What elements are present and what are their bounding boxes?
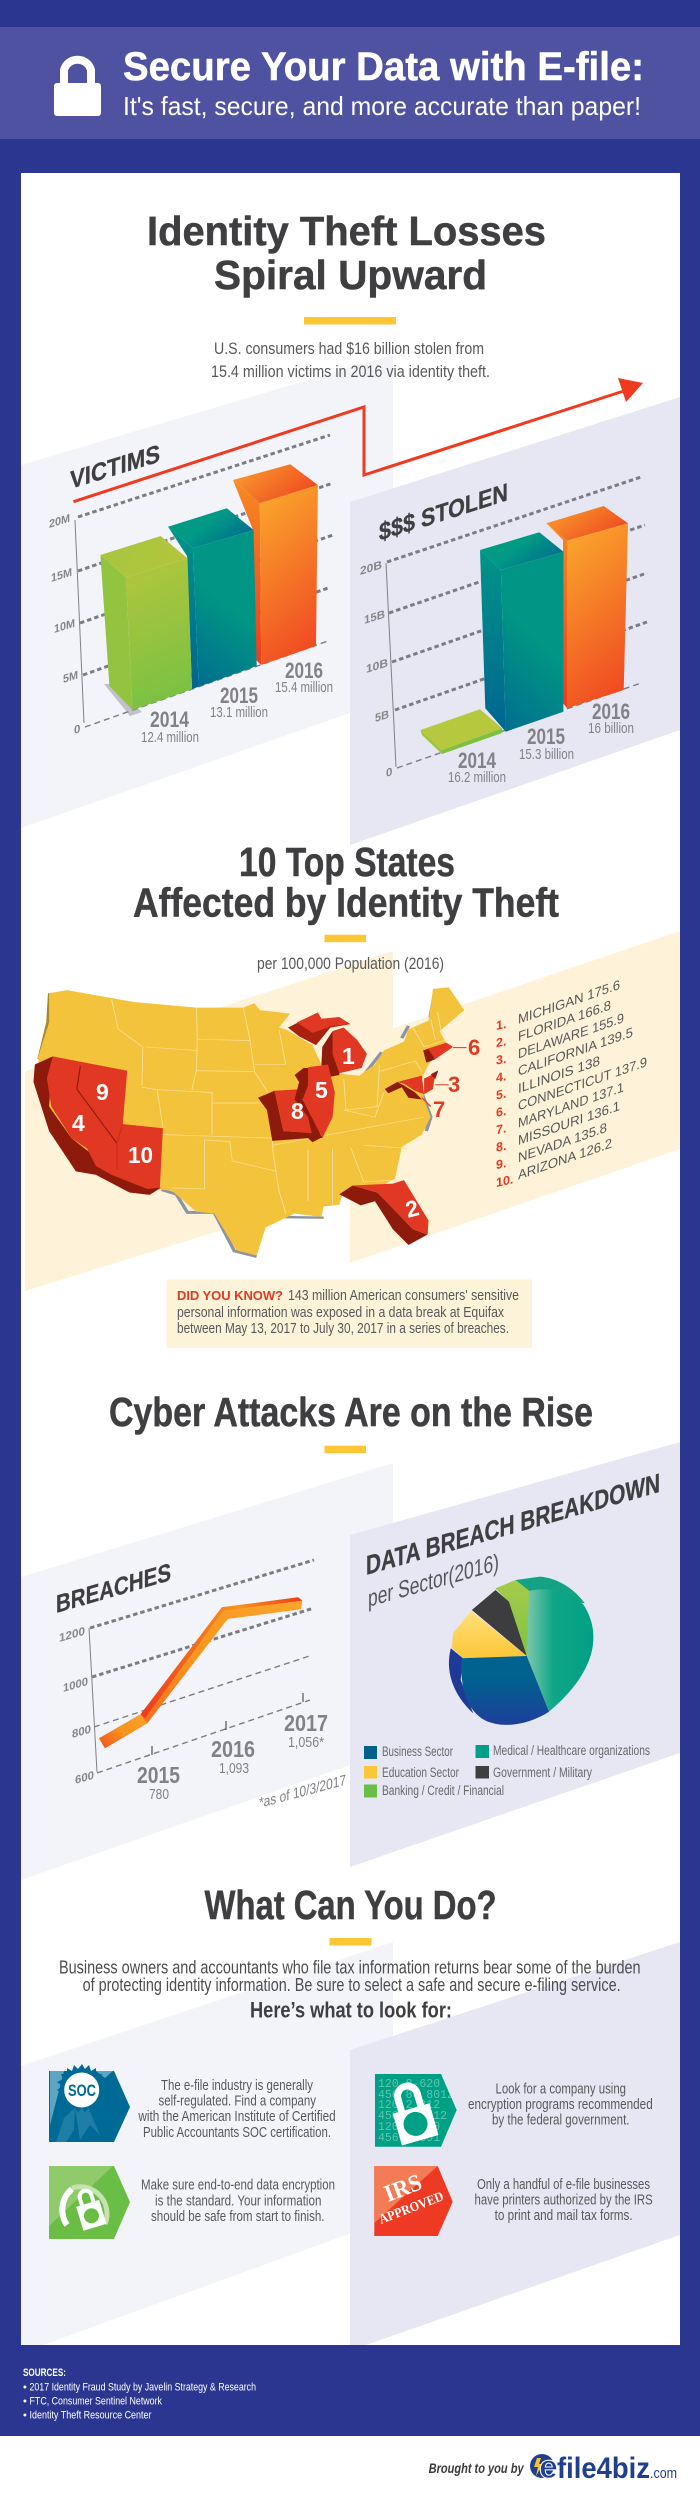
list: top states: ILLINOIS 138 xyxy=(518,1052,600,1096)
list: top states: FLORIDA 166.8 xyxy=(518,997,611,1044)
axis labels: 1000 xyxy=(63,1675,88,1695)
state: Florida xyxy=(339,1180,429,1245)
tip text: with the American Institute of Certified xyxy=(138,2108,336,2125)
intro text: 15.4 million victims in 2016 via identity theft. xyxy=(211,363,490,381)
state: Maryland and Delaware xyxy=(385,1070,438,1100)
sources: FTC, Consumer Sentinel Network xyxy=(30,2396,162,2408)
header subtitle: It's fast, secure, and more accurate than paper! xyxy=(123,91,641,121)
list: top states: 8. xyxy=(496,1139,506,1155)
ticks xyxy=(152,1693,303,1755)
bar: 2015 xyxy=(168,508,257,689)
heading: top states: 10 Top States xyxy=(239,839,455,885)
heading: identity theft losses: Identity Theft Losses xyxy=(147,208,546,254)
label: 2015: 2015 xyxy=(220,683,258,708)
label: 2015 xyxy=(519,724,574,763)
heading: what can you do: What Can You Do? xyxy=(204,1882,496,1928)
legend: Education Sector xyxy=(382,1765,459,1780)
state: Missouri xyxy=(258,1089,324,1142)
label: 2016 xyxy=(211,1736,255,1777)
axis labels: 0 xyxy=(74,722,81,737)
label: 2016: 1,093 xyxy=(219,1761,249,1777)
state: Illinois xyxy=(295,1064,335,1138)
tip text xyxy=(468,2080,653,2129)
map numbers: 2 xyxy=(403,1194,422,1223)
axis labels xyxy=(360,558,393,780)
chart: victims xyxy=(49,435,333,746)
intro text: U.S. consumers had $16 billion stolen from xyxy=(214,340,484,358)
list: top states: NEVADA 135.8 xyxy=(518,1119,607,1165)
pie chart xyxy=(449,1577,593,1725)
heading: cyber attacks: Cyber Attacks Are on the Rise xyxy=(109,1389,593,1435)
bar: 2016 xyxy=(233,464,318,665)
tip text: The e-file industry is generally xyxy=(161,2077,313,2094)
subheading: per population: per 100,000 Population (2016) xyxy=(257,955,444,973)
chart title: victims: VICTIMS xyxy=(70,440,160,495)
callout: did you know xyxy=(166,1280,532,1348)
sources: Identity Theft Resource Center xyxy=(30,2410,152,2422)
list: top states: MICHIGAN 175.6 xyxy=(518,976,620,1027)
tip text: Only a handful of e-file businesses xyxy=(477,2176,650,2193)
state: Michigan xyxy=(288,1013,367,1077)
icon: teal padlock: 120 478 0 xyxy=(378,2121,440,2134)
list: top states: 9. xyxy=(496,1156,506,1172)
callout: did you know: personal information was exposed in a data break at Equifax xyxy=(177,1305,505,1321)
icon: teal padlock: 120 2 212 xyxy=(378,2099,440,2112)
label: 2014: 2014 xyxy=(458,748,497,773)
label: 2014 xyxy=(141,707,199,746)
accent bar xyxy=(324,1446,366,1453)
label: 2016 xyxy=(588,699,634,737)
label: 2016: 2016 xyxy=(285,658,323,683)
subheading: what to look for: Here’s what to look for: xyxy=(250,1998,452,2023)
axis labels xyxy=(59,1625,94,1787)
line ribbon xyxy=(99,1597,302,1748)
sources: • xyxy=(23,2396,27,2408)
list: top states: 5. xyxy=(496,1087,506,1103)
tip text xyxy=(474,2176,653,2224)
label: 2015: 13.1 million xyxy=(210,705,268,721)
tip text: self-regulated. Find a company xyxy=(158,2092,316,2110)
tip text: Look for a company using xyxy=(496,2080,626,2097)
icon: teal padlock: 120 8-620 xyxy=(378,2078,440,2091)
icon: padlock xyxy=(54,60,101,116)
tip text: to print and mail tax forms. xyxy=(495,2207,633,2224)
label: 2014: 2014 xyxy=(150,707,190,732)
tip text: encryption programs recommended xyxy=(468,2096,653,2113)
icon: SOC seal xyxy=(49,2064,130,2142)
legend: Business Sector xyxy=(382,1744,453,1759)
list: top states: DELAWARE 155.9 xyxy=(518,1009,624,1062)
tip: end-to-end encryption xyxy=(49,2166,335,2239)
panel backgrounds xyxy=(21,355,680,2353)
axis labels: 1200 xyxy=(59,1625,85,1645)
label: 2014 xyxy=(448,748,506,786)
header band xyxy=(0,27,700,139)
accent bar xyxy=(304,317,396,324)
label: 2014: 12.4 million xyxy=(141,730,199,746)
icon: IRS approved stamp: IRS xyxy=(381,2170,426,2208)
legend xyxy=(364,1743,650,1798)
list: top states: 1. xyxy=(496,1017,506,1033)
label: 2017 xyxy=(284,1710,328,1751)
axis labels: 800 xyxy=(72,1723,91,1741)
axis labels: 5B xyxy=(375,708,389,725)
legend: Government / Military xyxy=(493,1765,592,1780)
axis labels: 600 xyxy=(75,1769,94,1787)
map: United States xyxy=(33,987,480,1257)
label: 2015: 780 xyxy=(149,1787,169,1803)
heading: top states xyxy=(133,839,559,926)
header title: Secure Your Data with E-file: xyxy=(123,45,644,89)
axis labels: 10M xyxy=(54,617,75,636)
intro text xyxy=(211,340,490,381)
icon: teal padlock: 450 90 012 xyxy=(378,2110,447,2123)
tip: IRS approved xyxy=(374,2166,653,2236)
chart subtitle: per Sector(2016) xyxy=(368,1549,499,1613)
sources: • xyxy=(23,2410,27,2422)
list: top states: MISSOURI 136.1 xyxy=(518,1097,620,1148)
sources: • xyxy=(23,2382,27,2394)
arrow: rising trend xyxy=(74,378,643,502)
bar: 2016 xyxy=(546,506,628,708)
tip text xyxy=(138,2077,336,2141)
label: 2015 xyxy=(210,683,268,721)
chart title: breaches: BREACHES xyxy=(56,1558,171,1619)
icon: SOC seal: SOC xyxy=(68,2081,96,2100)
label: 2015: 2015 xyxy=(137,1762,180,1788)
label: 2014: 16.2 million xyxy=(448,770,506,786)
bar: 2015 xyxy=(480,532,563,732)
map numbers xyxy=(72,1035,480,1223)
chart: data breach breakdown xyxy=(364,1467,660,1798)
list: top states: CONNECTICUT 137.9 xyxy=(518,1053,647,1113)
bar: 2014 xyxy=(420,709,502,754)
label: 2017: 2017 xyxy=(284,1710,328,1736)
map numbers: 8 xyxy=(291,1098,304,1124)
axis labels: 0 xyxy=(386,765,393,780)
tip text: should be safe from start to finish. xyxy=(151,2208,324,2225)
label: 2016: 16 billion xyxy=(588,721,634,737)
icon: green padlock xyxy=(49,2166,130,2239)
logo: efile4biz: file4biz xyxy=(557,2452,650,2485)
icon: teal padlock: 456 9 801 xyxy=(378,2132,440,2145)
list: top states: CALIFORNIA 139.5 xyxy=(518,1024,633,1079)
list: top states: 4. xyxy=(496,1069,506,1085)
map numbers: 9 xyxy=(96,1079,109,1105)
legend: Medical / Healthcare organizations xyxy=(493,1743,650,1758)
logo: efile4biz: e xyxy=(539,2448,558,2485)
map numbers: 10 xyxy=(128,1142,153,1168)
axis labels: 5M xyxy=(63,669,78,686)
label: 2015: 2015 xyxy=(527,724,565,749)
sources xyxy=(23,2367,256,2422)
axis labels: 10B xyxy=(366,656,388,676)
icon: teal padlock: 456 86 8012 xyxy=(378,2089,454,2102)
axis labels: 20B xyxy=(360,558,382,578)
label: 2016: 2016 xyxy=(211,1736,255,1762)
map numbers: 5 xyxy=(315,1077,328,1103)
map numbers: 7 xyxy=(433,1097,445,1122)
label: 2017: 1,056* xyxy=(288,1735,324,1751)
icon: IRS approved stamp: APPROVED xyxy=(377,2188,446,2227)
state: Connecticut xyxy=(423,1043,453,1063)
axis labels: 20M xyxy=(49,512,70,531)
list: top states: 6. xyxy=(496,1104,506,1120)
list: top states: MARYLAND 137.1 xyxy=(518,1079,624,1131)
map numbers: 3 xyxy=(448,1072,460,1097)
label: 2016: 15.4 million xyxy=(275,680,333,696)
chart title: stolen: $$$ STOLEN xyxy=(379,479,508,547)
map numbers: 1 xyxy=(342,1043,355,1069)
list: top states xyxy=(496,976,647,1190)
sources: SOURCES: xyxy=(23,2367,66,2379)
callout: did you know: 143 million American consumers' sensitive xyxy=(288,1288,519,1304)
callout: did you know: between May 13, 2017 to July 30, 2017 in a series of breaches. xyxy=(177,1321,509,1337)
label: 2015: 15.3 billion xyxy=(519,747,574,763)
list: top states: 3. xyxy=(496,1052,506,1068)
list: top states: ARIZONA 126.2 xyxy=(518,1135,612,1183)
logo: efile4biz: .com xyxy=(650,2465,677,2482)
accent bar xyxy=(330,1938,372,1946)
list: top states: 10. xyxy=(496,1172,513,1190)
logo: efile4biz xyxy=(530,2448,677,2485)
tip text: is the standard. Your information xyxy=(155,2192,321,2209)
tip text: by the federal government. xyxy=(492,2112,630,2129)
map numbers: 6 xyxy=(468,1035,480,1060)
label: 2015 xyxy=(137,1762,180,1803)
legend: Banking / Credit / Financial xyxy=(382,1783,504,1798)
sources: 2017 Identity Fraud Study by Javelin Strategy & Research xyxy=(30,2382,256,2394)
chart: breaches xyxy=(56,1558,346,1812)
tip text: Public Accountants SOC certification. xyxy=(143,2124,331,2141)
label: 2016 xyxy=(275,658,333,696)
tip: SOC certification xyxy=(49,2064,336,2142)
icon: teal padlock xyxy=(375,2074,457,2147)
footer credit: Brought to you by xyxy=(429,2460,525,2476)
axis labels: 15B xyxy=(364,608,385,627)
icon: IRS approved stamp xyxy=(374,2166,453,2236)
chart: $$$ stolen xyxy=(360,477,647,786)
heading: top states: Affected by Identity Theft xyxy=(133,880,559,926)
heading: identity theft losses: Spiral Upward xyxy=(214,252,487,298)
state group: CA NV AZ xyxy=(33,1056,163,1195)
tip text: Make sure end-to-end data encryption xyxy=(141,2177,335,2194)
axis labels xyxy=(49,512,81,737)
callout: did you know: DID YOU KNOW? xyxy=(177,1288,283,1303)
intro paragraph xyxy=(59,1956,641,1995)
tip text xyxy=(141,2177,335,2225)
map numbers: 4 xyxy=(72,1110,85,1136)
list: top states: 7. xyxy=(496,1121,506,1137)
bar: 2014 xyxy=(100,536,192,710)
accent bar xyxy=(324,935,366,942)
label: 2016: 2016 xyxy=(592,699,630,724)
footnote: *as of 10/3/2017 xyxy=(259,1772,346,1812)
list: top states: 2. xyxy=(496,1034,506,1050)
heading: identity theft losses xyxy=(147,208,546,298)
axis labels: 15M xyxy=(51,566,72,585)
tip: encryption programs xyxy=(375,2074,653,2147)
